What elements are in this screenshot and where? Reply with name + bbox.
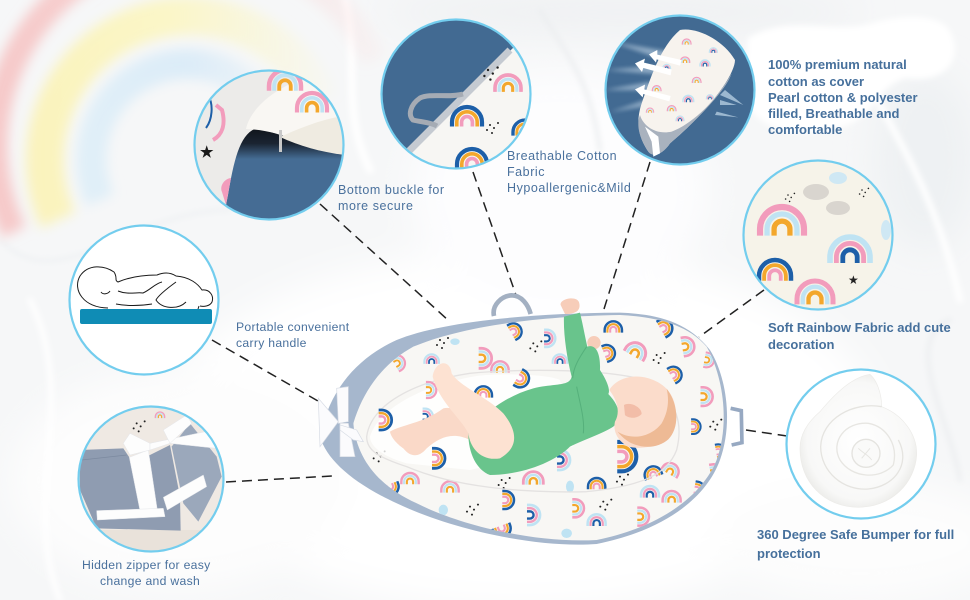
main product: baby nest: [318, 295, 742, 550]
callout text: carry handle: Portable convenient: [236, 320, 350, 334]
callout circle: hidden zipper: [77, 405, 225, 553]
callout text: bottom buckle: [338, 183, 445, 213]
dashed connector lines: [212, 162, 787, 482]
callout circle: safe bumper coil: [786, 370, 936, 518]
callout text: safe bumper: 360 Degree Safe Bumper for full: [757, 527, 954, 542]
baby head: [609, 377, 676, 448]
baby green bodysuit: [468, 313, 619, 475]
baby line drawing: [78, 267, 213, 309]
outer grey bumper: [320, 313, 727, 545]
callout circle: carry handle photo: [380, 20, 537, 172]
air rays: [608, 42, 664, 112]
callout text: premium cotton: comfortable: [768, 122, 842, 137]
left grey panel: [79, 445, 181, 531]
callout text: hidden zipper: Hidden zipper for easy: [82, 558, 211, 572]
callout text: premium cotton: [768, 57, 918, 137]
callout text: breathable cotton: [507, 149, 631, 195]
inner mattress rim: [367, 370, 679, 492]
callout text: hidden zipper: change and wash: [100, 574, 200, 588]
carry handle top: [494, 295, 531, 316]
callout circle: rainbow fabric: ★: [848, 273, 859, 287]
callout text: rainbow fabric: Soft Rainbow Fabric add cute: [768, 320, 951, 335]
baby far leg: [390, 408, 470, 455]
callout circle: bottom buckle photo: ★: [200, 144, 214, 161]
callout text: carry handle: [236, 320, 350, 350]
callout circle: breathable fabric photo: [600, 10, 760, 170]
callout text: rainbow fabric: decoration: [768, 337, 835, 352]
satin ribbon: [97, 415, 217, 520]
callout text: breathable cotton: Fabric: [507, 165, 545, 179]
right grey panel: [172, 423, 222, 522]
patterned inner fabric: [354, 315, 724, 540]
callout text: premium cotton: 100% premium natural: [768, 57, 907, 72]
callout text: hidden zipper: [82, 558, 211, 588]
airflow arrows: [635, 50, 682, 101]
callout text: bottom buckle: more secure: [338, 199, 414, 213]
callout text: premium cotton: filled, Breathable and: [768, 106, 900, 121]
callout text: premium cotton: Pearl cotton & polyester: [768, 90, 918, 105]
baby: [390, 298, 676, 475]
center cushion lighter patch: [370, 374, 573, 470]
callout text: bottom buckle: Bottom buckle for: [338, 183, 445, 197]
callout text: rainbow fabric: [768, 320, 951, 352]
callout circle: rainbow fabric: [740, 155, 900, 315]
callout text: carry handle: carry handle: [236, 336, 307, 350]
white rolled bumper: [800, 374, 917, 507]
mattress bar: [80, 309, 212, 324]
callout circle: baby outline on mattress: [70, 226, 218, 374]
baby hands: [561, 298, 580, 314]
white ribbon bow: [318, 387, 363, 457]
callout circle: bottom buckle photo: [190, 65, 350, 225]
mini nest: [638, 29, 735, 155]
callout text: breathable cotton: Breathable Cotton: [507, 149, 617, 163]
callout text: safe bumper: [757, 527, 954, 561]
white cloud behind top-right text: [745, 17, 955, 133]
callout text: breathable cotton: Hypoallergenic&Mild: [507, 181, 631, 195]
baby near leg: [433, 363, 514, 459]
side handle right: [731, 408, 742, 445]
watercolor rainbow: [0, 0, 375, 232]
callout text: safe bumper: protection: [757, 546, 821, 561]
callout text: premium cotton: cotton as cover: [768, 74, 864, 89]
